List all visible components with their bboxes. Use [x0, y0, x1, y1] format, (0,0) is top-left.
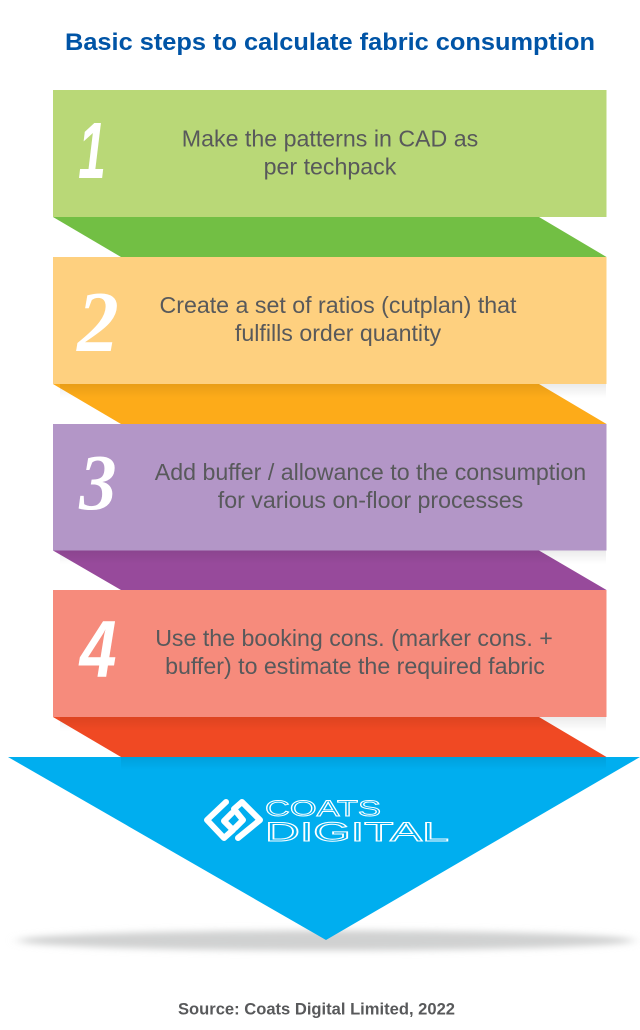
connector: orange fold: [53, 384, 606, 424]
panel: step 3: for various on-floor processes: [218, 487, 523, 513]
arrow: blue triangle: [8, 757, 640, 940]
number 2: 2: [75, 275, 119, 370]
panel: step 4: buffer) to estimate the required fabric: [165, 653, 545, 679]
panel: step 2: fulfills order quantity: [235, 320, 442, 346]
panel: step 1: per techpack: [264, 154, 397, 180]
step 2 text: Create a set of ratios (cutplan) that: [159, 292, 517, 318]
panel: step 2: [53, 257, 606, 384]
connector: green fold: [53, 217, 606, 257]
logo wordmark: [265, 796, 449, 847]
number 1: 1: [78, 107, 106, 196]
number 4: 4: [78, 604, 116, 694]
panel: step 1: [53, 90, 606, 217]
connector: red fold: [53, 717, 606, 757]
icon: linked diamonds: [207, 802, 260, 838]
logo wordmark: DIGITAL: [265, 817, 449, 847]
step 1 text: Make the patterns in CAD as: [182, 126, 478, 152]
number 3: 3: [78, 438, 117, 527]
step 4 text: Use the booking cons. (marker cons. +: [155, 625, 553, 651]
floor shadow: [18, 930, 634, 950]
source note: Source: Coats Digital Limited, 2022: [178, 1000, 455, 1018]
logo: Coats Digital: [207, 796, 449, 847]
logo wordmark: COATS: [265, 796, 381, 821]
step 3 text: Add buffer / allowance to the consumption: [155, 459, 586, 485]
panel: step 3: [53, 424, 606, 550]
title: Basic steps to calculate fabric consumption: [65, 29, 595, 56]
panel: step 4: [53, 590, 606, 717]
connector: purple fold: [53, 550, 606, 590]
